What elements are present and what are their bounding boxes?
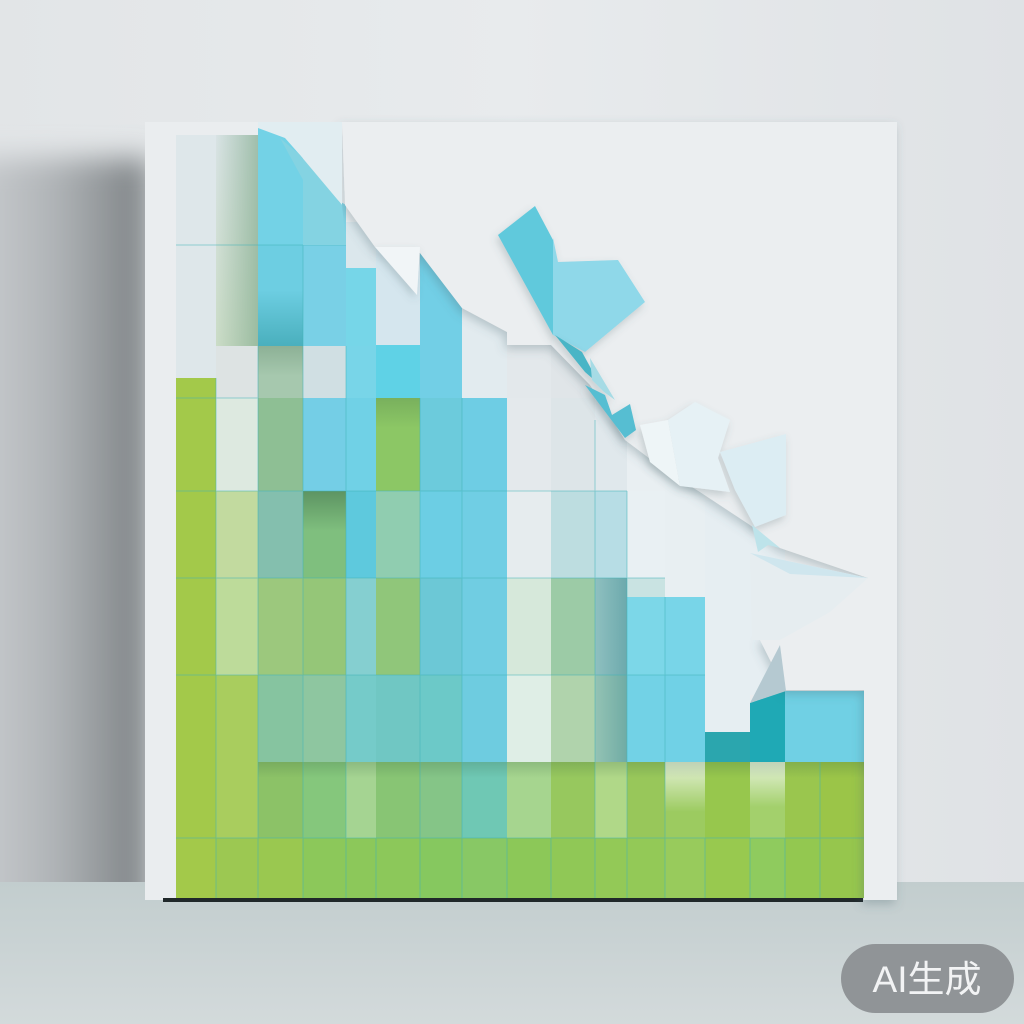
small teal shards <box>555 335 636 438</box>
stepped bar grid <box>176 128 864 898</box>
background wall <box>0 138 145 882</box>
column 9 <box>507 345 551 898</box>
curled paper flap <box>375 247 420 295</box>
column 10 <box>551 345 595 898</box>
column 16 <box>785 691 820 898</box>
column 11 <box>595 400 627 898</box>
AI badge: AI生成 <box>873 959 981 1000</box>
folded corner at top <box>258 122 346 245</box>
column 15 <box>750 525 785 898</box>
column 8 <box>462 308 507 898</box>
column 13 <box>665 470 705 898</box>
column 14 <box>705 500 750 898</box>
column 17 <box>820 691 864 898</box>
floor <box>0 882 1024 1024</box>
column 6 <box>376 247 420 898</box>
AI badge <box>841 944 1014 1013</box>
grey fold above teal block <box>750 645 786 703</box>
column 2 <box>216 135 258 898</box>
column 3 <box>258 128 303 898</box>
torn white paper overlay <box>342 122 897 900</box>
pale torn shards <box>640 402 786 527</box>
shadow below blue blocks <box>258 762 864 778</box>
column 4 <box>303 180 346 898</box>
grid lines <box>176 245 864 898</box>
column 5 <box>346 222 376 898</box>
torn paper tail <box>750 525 868 640</box>
column 12 <box>627 440 665 898</box>
blue torn shard <box>498 206 645 352</box>
column 7 <box>420 253 462 898</box>
paper panel <box>145 122 897 902</box>
column 1 <box>176 135 216 898</box>
